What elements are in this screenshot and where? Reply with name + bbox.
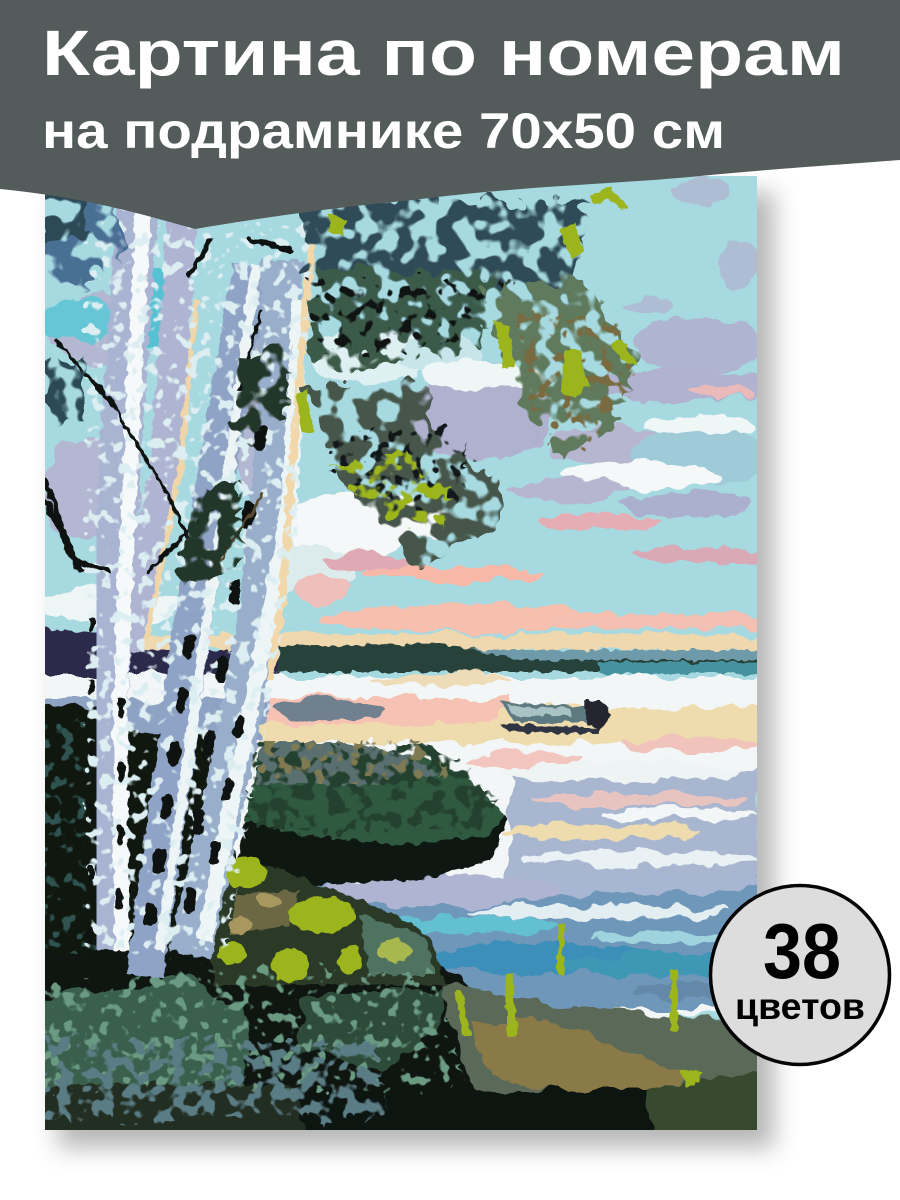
reed texture <box>250 745 500 830</box>
birch bark marks <box>45 240 290 960</box>
bush base <box>205 860 445 985</box>
foreground bank left <box>45 950 757 1130</box>
yellow-green bush <box>218 856 704 1086</box>
birch bark lights <box>90 200 320 950</box>
sky and clouds <box>40 176 770 652</box>
lower leaf cluster <box>306 385 510 570</box>
left green foliage with branches <box>180 340 290 590</box>
upper foliage dark layer <box>300 200 590 360</box>
header banner <box>0 0 900 229</box>
subtitle: на подрамнике 70х50 см <box>42 103 725 159</box>
right drooping branch <box>480 280 640 460</box>
reed olive tips <box>262 742 460 780</box>
left dark bank behind trees <box>45 702 236 956</box>
title: Картина по номерам <box>42 17 845 89</box>
top-left blue foliage <box>45 190 130 290</box>
badge: 38 colours: цветов <box>735 986 865 1027</box>
badge: 38 colours <box>710 886 890 1064</box>
left dark foliage <box>45 180 90 430</box>
birch trunks <box>107 200 312 975</box>
upper foliage green layer <box>310 270 500 370</box>
lower leaf cluster dark <box>330 430 470 510</box>
painting: birches by the lake <box>40 176 770 1135</box>
right drooping branch brown <box>520 310 640 450</box>
lake water <box>40 675 770 1016</box>
foreground foliage texture <box>45 960 470 1090</box>
lime leaves <box>337 450 456 530</box>
dark bank texture <box>45 718 152 955</box>
canvas shadow <box>58 192 774 1148</box>
boat <box>500 700 612 734</box>
foreground blue-grey grass <box>50 1040 390 1120</box>
upper foliage black layer <box>310 280 520 360</box>
reed island <box>238 742 508 885</box>
far shoreline <box>40 628 760 680</box>
badge: 38 colours: 38 <box>763 907 841 995</box>
lime leaves upper <box>296 187 636 433</box>
